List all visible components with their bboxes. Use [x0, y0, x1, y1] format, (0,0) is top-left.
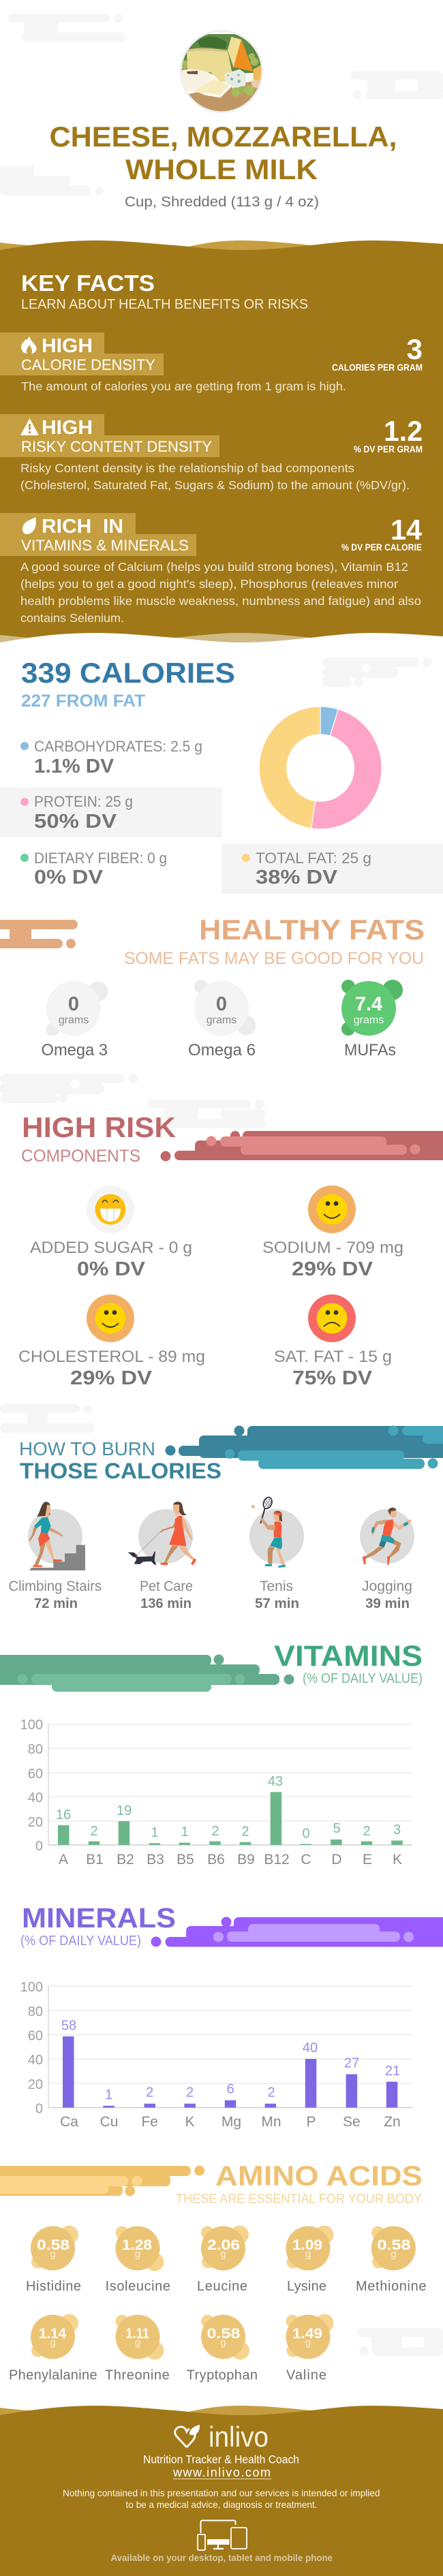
fat: omega 6: Omega 6: [188, 1041, 256, 1059]
fact: calorie density: [0, 332, 423, 393]
amino: phenylalanine: g: [50, 2337, 56, 2348]
bar chart: minerals: 80: [28, 2004, 43, 2019]
amino: threonine: g: [135, 2337, 140, 2348]
bar chart: vitamins: 100: [20, 1718, 43, 1733]
bar chart: vitamins: 2: [241, 1825, 249, 1840]
bar chart: minerals: 20: [28, 2077, 43, 2092]
heading: minerals: MINERALS: [22, 1902, 176, 1934]
fat: omega 3: grams: [59, 1014, 89, 1026]
serving size: Cup, Shredded (113 g / 4 oz): [125, 193, 319, 210]
bar chart: vitamins: B9: [237, 1852, 255, 1867]
bar chart: minerals: [20, 1980, 412, 2130]
bar chart: vitamins: B3: [147, 1852, 164, 1867]
bar chart: vitamins: 1: [181, 1825, 189, 1840]
activity: pet care: Pet Care: [140, 1579, 193, 1594]
amino: threonine: Threonine: [105, 2368, 170, 2383]
amino: isoleucine: [106, 2226, 170, 2294]
amino: lysine: Lysine: [287, 2279, 326, 2294]
bar chart: vitamins: C: [301, 1852, 311, 1867]
amino: valine: Valine: [286, 2368, 326, 2383]
bar chart: vitamins: D: [331, 1852, 342, 1867]
bar chart: vitamins: B1: [86, 1852, 104, 1867]
risk: sodium: SODIUM - 709 mg: [262, 1239, 403, 1257]
panel: healthy fats: [0, 914, 425, 1059]
bar chart: minerals: 58: [61, 2019, 76, 2034]
panel: key facts: [0, 240, 443, 642]
amino: histidine: Histidine: [26, 2279, 81, 2294]
risk: sodium: [262, 1185, 403, 1280]
fact: risky content density: % DV PER GRAM: [354, 444, 423, 454]
fact: calorie density: 3: [407, 333, 423, 365]
amino: tryptophan: g: [220, 2337, 226, 2348]
activity: jogging: [360, 1508, 414, 1611]
heading: amino acids: AMINO ACIDS: [215, 2160, 423, 2191]
fat: omega 3: [41, 981, 108, 1059]
panel: how to burn those calories: [8, 1425, 443, 1611]
title: [49, 121, 397, 185]
amino: tryptophan: [187, 2315, 258, 2383]
subheading: SOME FATS MAY BE GOOD FOR YOU: [124, 949, 424, 968]
activity: climbing stairs: Climbing Stairs: [8, 1579, 102, 1594]
subheading: components: COMPONENTS: [21, 1147, 140, 1166]
footer: [0, 2406, 443, 2576]
fact: risky content density: HIGH: [42, 417, 93, 439]
risk: added sugar: ADDED SUGAR - 0 g: [30, 1239, 192, 1257]
amino: methionine: Methionine: [356, 2279, 427, 2294]
risk: saturated fat: SAT. FAT - 15 g: [274, 1348, 392, 1366]
bar chart: vitamins: B5: [177, 1852, 194, 1867]
legend: dietary fiber: 0% DV: [34, 867, 104, 888]
risk: added sugar: 0% DV: [77, 1258, 146, 1280]
bar chart: vitamins: 16: [56, 1807, 71, 1822]
availability note: Available on your desktop, tablet and mobile phone: [110, 2552, 333, 2563]
fact: calorie density: CALORIE DENSITY: [21, 356, 155, 373]
amino: threonine: [105, 2315, 170, 2383]
bar chart: minerals: Cu: [100, 2114, 118, 2130]
activity: tennis: 57 min: [255, 1596, 299, 1611]
amino: methionine: 0.58: [378, 2237, 411, 2253]
amino: phenylalanine: Phenylalanine: [9, 2368, 97, 2383]
legend: carbohydrates: 1.1% DV: [34, 756, 114, 777]
icon: tennis player: [251, 1496, 286, 1568]
subheading: LEARN ABOUT HEALTH BENEFITS OR RISKS: [21, 297, 308, 312]
fact: rich in vitamins and minerals: health problems like muscle weakness, numbness and fatigue) and also: [20, 594, 421, 608]
icon: warning triangle: [20, 418, 39, 435]
bar chart: minerals: Mg: [222, 2114, 241, 2130]
risk: cholesterol: CHOLESTEROL - 89 mg: [18, 1348, 205, 1366]
fat: omega 6: [188, 980, 256, 1059]
donut chart: [259, 707, 382, 829]
activity: climbing stairs: 72 min: [34, 1596, 78, 1611]
fat: MUFAs: MUFAs: [344, 1041, 396, 1059]
legend: total fat: [242, 850, 371, 888]
bar chart: vitamins: 0: [35, 1839, 43, 1854]
bar chart: vitamins: 5: [333, 1821, 341, 1836]
amino: isoleucine: g: [135, 2248, 140, 2260]
risk: cholesterol: [18, 1294, 205, 1389]
fact: risky content density: 1.2: [384, 415, 423, 447]
amino: phenylalanine: 1.14: [39, 2326, 66, 2342]
fat: MUFAs: grams: [354, 1014, 384, 1026]
bar chart: vitamins: 40: [28, 1790, 43, 1805]
bar chart: vitamins: 0: [302, 1827, 310, 1842]
activity: pet care: [128, 1502, 196, 1611]
amino: isoleucine: 1.28: [122, 2237, 152, 2253]
heading: key facts: KEY FACTS: [21, 270, 155, 296]
fact: rich in vitamins and minerals: % DV PER CALORIE: [341, 542, 422, 553]
amino: isoleucine: Isoleucine: [106, 2279, 170, 2294]
fact: rich in vitamins and minerals: [0, 513, 423, 625]
panel: minerals: [20, 1902, 443, 2130]
bar chart: vitamins: B12: [264, 1852, 290, 1867]
risk: sodium: 29% DV: [292, 1258, 373, 1280]
panel: amino acids: [0, 2160, 427, 2383]
bar chart: vitamins: 2: [90, 1824, 98, 1839]
amino: histidine: g: [50, 2248, 56, 2260]
risk: saturated fat: [274, 1294, 392, 1389]
amino: leucine: [197, 2225, 249, 2294]
heading: high risk: HIGH RISK: [22, 1111, 176, 1143]
legend: protein: 50% DV: [34, 811, 117, 833]
icon: jogger: [363, 1508, 412, 1565]
legend: total fat: TOTAL FAT: 25 g: [256, 850, 371, 867]
fact: risky content density: [0, 414, 423, 492]
risk: cholesterol: 29% DV: [70, 1367, 153, 1389]
bar chart: vitamins: 19: [117, 1803, 132, 1818]
amino: leucine: g: [220, 2248, 226, 2260]
amino: methionine: g: [391, 2248, 397, 2260]
amino: histidine: 0.58: [37, 2237, 70, 2253]
amino: lysine: 1.09: [292, 2237, 322, 2253]
fat: omega 6: 0: [216, 993, 227, 1015]
bar chart: minerals: Fe: [141, 2114, 158, 2130]
amino: leucine: Leucine: [197, 2279, 247, 2294]
legend: protein: PROTEIN: 25 g: [34, 793, 133, 810]
risk: added sugar: [30, 1185, 192, 1280]
legend backgrounds: [0, 788, 443, 894]
banner graphic: amber: [0, 2165, 204, 2197]
subheading: percent of daily value: (% OF DAILY VALUE): [20, 1934, 141, 1949]
activity: jogging: 39 min: [365, 1596, 410, 1611]
banner graphic: orange: [0, 920, 78, 948]
food photo: cheese board: [180, 30, 263, 113]
amino: lysine: g: [305, 2248, 311, 2260]
icon: flame: [21, 336, 36, 354]
bar chart: vitamins: 2: [211, 1824, 219, 1839]
fact: rich in vitamins and minerals: RICH IN: [42, 516, 123, 538]
bar chart: vitamins: B2: [117, 1852, 134, 1867]
amino: valine: g: [305, 2337, 311, 2348]
fact: calorie density: The amount of calories you are getting from 1 gram is high.: [21, 379, 346, 393]
fact: risky content density: (Cholesterol, Saturated Fat, Sugars & Sodium) to the amount (%DV/gr).: [20, 478, 410, 492]
amino: threonine: 1.11: [125, 2326, 149, 2342]
bar chart: minerals: 40: [28, 2053, 43, 2068]
bar chart: minerals: 27: [344, 2056, 359, 2071]
amino: tryptophan: Tryptophan: [187, 2368, 258, 2383]
icon: woman walking dog: [128, 1502, 196, 1565]
icon: devices: [198, 2521, 247, 2550]
bar chart: minerals: 2: [186, 2085, 194, 2100]
bar chart: vitamins: 2: [363, 1824, 371, 1839]
legend: dietary fiber: DIETARY FIBER: 0 g: [34, 850, 167, 867]
bar chart: vitamins: E: [363, 1852, 372, 1867]
bar chart: vitamins: K: [393, 1852, 402, 1867]
fat: omega 3: Omega 3: [41, 1041, 108, 1059]
bar chart: minerals: 0: [35, 2101, 43, 2116]
bar chart: minerals: 1: [105, 2088, 112, 2102]
amino: histidine: [26, 2225, 81, 2294]
title: WHOLE MILK: [125, 153, 318, 185]
bar chart: vitamins: B6: [207, 1852, 225, 1867]
banner graphic: teal: [165, 1425, 443, 1469]
bar chart: vitamins: A: [59, 1852, 68, 1867]
subheading: from fat: 227 FROM FAT: [21, 692, 145, 711]
bar chart: minerals: P: [306, 2114, 316, 2130]
banner graphic: green: [0, 1654, 294, 1692]
heading: vitamins: VITAMINS: [274, 1640, 423, 1673]
subheading: percent of daily value: (% OF DAILY VALUE): [303, 1671, 423, 1686]
fact: rich in vitamins and minerals: contains Selenium.: [20, 611, 124, 625]
amino: tryptophan: 0.58: [207, 2326, 241, 2342]
title: CHEESE, MOZZARELLA,: [49, 121, 397, 153]
panel: vitamins: [0, 1640, 423, 1867]
legend: dietary fiber: [20, 850, 167, 888]
bar chart: vitamins: 80: [28, 1742, 43, 1757]
bar chart: vitamins: 43: [268, 1774, 283, 1789]
risk: saturated fat: 75% DV: [292, 1367, 373, 1389]
subheading: THESE ARE ESSENTIAL FOR YOUR BODY: [176, 2192, 422, 2206]
heading: healthy fats: HEALTHY FATS: [199, 914, 425, 946]
fat: MUFAs: 7.4: [355, 993, 382, 1015]
fat: omega 6: grams: [207, 1014, 236, 1026]
logo: inlivo: inlivo: [209, 2421, 269, 2453]
icon: woman climbing stairs: [29, 1502, 85, 1570]
fact: calorie density: HIGH: [42, 335, 93, 357]
bar chart: minerals: 6: [226, 2082, 234, 2097]
heading: those calories: THOSE CALORIES: [20, 1459, 222, 1483]
bar chart: vitamins: 60: [28, 1767, 43, 1782]
banner graphic: red: [161, 1131, 443, 1161]
bar chart: minerals: K: [185, 2114, 195, 2130]
activity: tennis: Tenis: [260, 1579, 293, 1594]
fact: rich in vitamins and minerals: VITAMINS & MINERALS: [21, 537, 189, 554]
panel: calories: [0, 657, 443, 894]
amino: valine: 1.49: [292, 2326, 322, 2342]
bar chart: minerals: Se: [343, 2114, 361, 2130]
amino: phenylalanine: [9, 2314, 97, 2383]
bar chart: minerals: 2: [146, 2085, 153, 2100]
activity: jogging: Jogging: [362, 1579, 412, 1594]
bar chart: vitamins: 3: [393, 1822, 401, 1837]
bar chart: vitamins: 1: [151, 1825, 159, 1840]
tagline: Nutrition Tracker & Health Coach: [143, 2453, 299, 2466]
bar chart: minerals: Ca: [60, 2114, 78, 2130]
website link: www.inlivo.com: [172, 2466, 271, 2479]
fact: calorie density: CALORIES PER GRAM: [332, 362, 423, 373]
fact: rich in vitamins and minerals: 14: [391, 514, 423, 546]
bar chart: minerals: 60: [28, 2029, 43, 2044]
fat: MUFAs: [341, 980, 403, 1059]
disclaimer: Nothing contained in this presentation and our services is intended or implied: [63, 2487, 380, 2498]
legend: carbohydrates: CARBOHYDRATES: 2.5 g: [34, 738, 202, 755]
bar chart: minerals: 21: [385, 2064, 400, 2079]
legend: carbohydrates: [20, 738, 202, 777]
fat: omega 3: 0: [68, 993, 79, 1015]
fact: risky content density: RISKY CONTENT DENSITY: [21, 438, 212, 455]
amino: valine: [286, 2314, 334, 2383]
bar chart: vitamins: [20, 1718, 412, 1867]
bar chart: minerals: Mn: [261, 2114, 281, 2130]
activity: climbing stairs: [8, 1502, 102, 1611]
fact: risky content density: Risky Content density is the relationship of bad components: [20, 461, 354, 475]
bar chart: vitamins: 20: [28, 1815, 43, 1830]
bar chart: minerals: 2: [267, 2085, 275, 2100]
fact: rich in vitamins and minerals: A good source of Calcium (helps you build strong bones), Vitamin B12: [20, 560, 408, 574]
heading: how to burn: HOW TO BURN: [19, 1438, 155, 1459]
bar chart: minerals: 40: [303, 2040, 318, 2055]
disclaimer: to be a medical advice, diagnosis or treatment.: [125, 2499, 318, 2510]
amino: lysine: [286, 2225, 334, 2294]
activity: tennis: [249, 1496, 304, 1611]
panel: high risk components: [18, 1111, 443, 1389]
bar chart: minerals: Zn: [384, 2114, 401, 2130]
amino: methionine: [356, 2226, 427, 2294]
heading: 339 calories: 339 CALORIES: [21, 657, 235, 689]
bar chart: minerals: 100: [20, 1980, 43, 1995]
banner graphic: purple: [151, 1917, 443, 1947]
disclaimer: [63, 2487, 380, 2510]
legend: total fat: 38% DV: [256, 867, 338, 888]
amino: leucine: 2.06: [207, 2237, 240, 2253]
legend: protein: [20, 793, 133, 833]
icon: leaf: [22, 517, 36, 534]
logo: inlivo: [175, 2421, 269, 2453]
activity: pet care: 136 min: [140, 1596, 192, 1611]
header: [49, 27, 397, 210]
fact: rich in vitamins and minerals: (helps you to get a good night's sleep), Phosphorus (releaves minor: [20, 577, 398, 591]
